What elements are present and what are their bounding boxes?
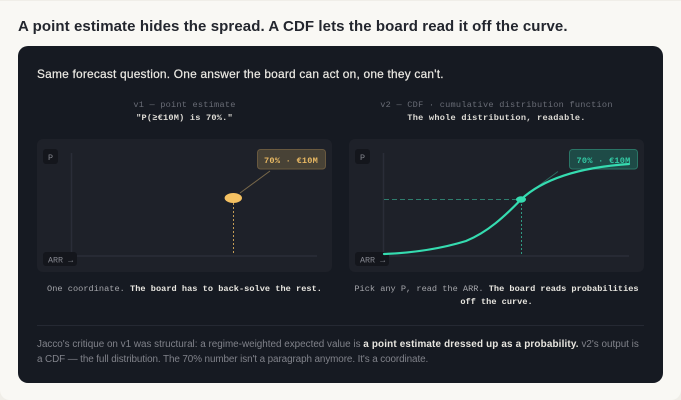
icon: axis tag P: P <box>360 153 365 163</box>
callout: 70% · €10M <box>576 156 631 166</box>
right column header: The whole distribution, readable. <box>407 113 586 123</box>
right caption: off the curve. <box>460 297 533 307</box>
right column header: v2 — CDF · cumulative distribution function <box>380 100 613 110</box>
icon: axis tag P <box>355 149 370 164</box>
leader line <box>522 172 558 198</box>
body note <box>37 339 639 365</box>
icon: axis tag ARR <box>43 252 77 266</box>
body note: Jacco's critique on v1 was structural: a regime-weighted expected value is a point estimate dressed up as a probability. v2's output is <box>37 339 639 350</box>
panel: dark card <box>18 46 663 383</box>
right column header <box>380 100 613 123</box>
right caption <box>354 284 639 307</box>
callout <box>258 150 326 169</box>
left column header <box>133 100 236 123</box>
icon: axis tag ARR: ARR → <box>360 256 385 266</box>
left caption: One coordinate. The board has to back-solve the rest. <box>47 284 322 294</box>
CDF curve <box>384 164 629 254</box>
chart: point estimate <box>48 149 326 266</box>
callout: 70% · €10M <box>264 156 318 166</box>
icon: axis tag P: P <box>48 153 53 163</box>
left column header: v1 — point estimate <box>133 100 236 110</box>
body note: a CDF — the full distribution. The 70% number isn't a paragraph anymore. It's a coordinate. <box>37 354 428 365</box>
subtitle: Same forecast question. One answer the board can act on, one they can't. <box>37 67 444 81</box>
divider <box>37 325 644 326</box>
title: A point estimate hides the spread. A CDF lets the board read it off the curve. <box>18 18 568 35</box>
dotted drop line <box>232 203 234 254</box>
point estimate dot <box>225 193 242 203</box>
CDF point dot <box>516 196 526 203</box>
right caption: Pick any P, read the ARR. The board reads probabilities <box>354 284 639 294</box>
icon: axis tag P <box>43 149 58 164</box>
dashed read-off lines <box>384 200 522 256</box>
callout <box>570 150 638 169</box>
chart: CDF <box>360 149 638 266</box>
icon: axis tag ARR <box>355 252 389 266</box>
leader line <box>240 171 270 193</box>
icon: axis tag ARR: ARR → <box>48 256 73 266</box>
left column header: "P(≥€10M) is 70%." <box>136 113 233 123</box>
